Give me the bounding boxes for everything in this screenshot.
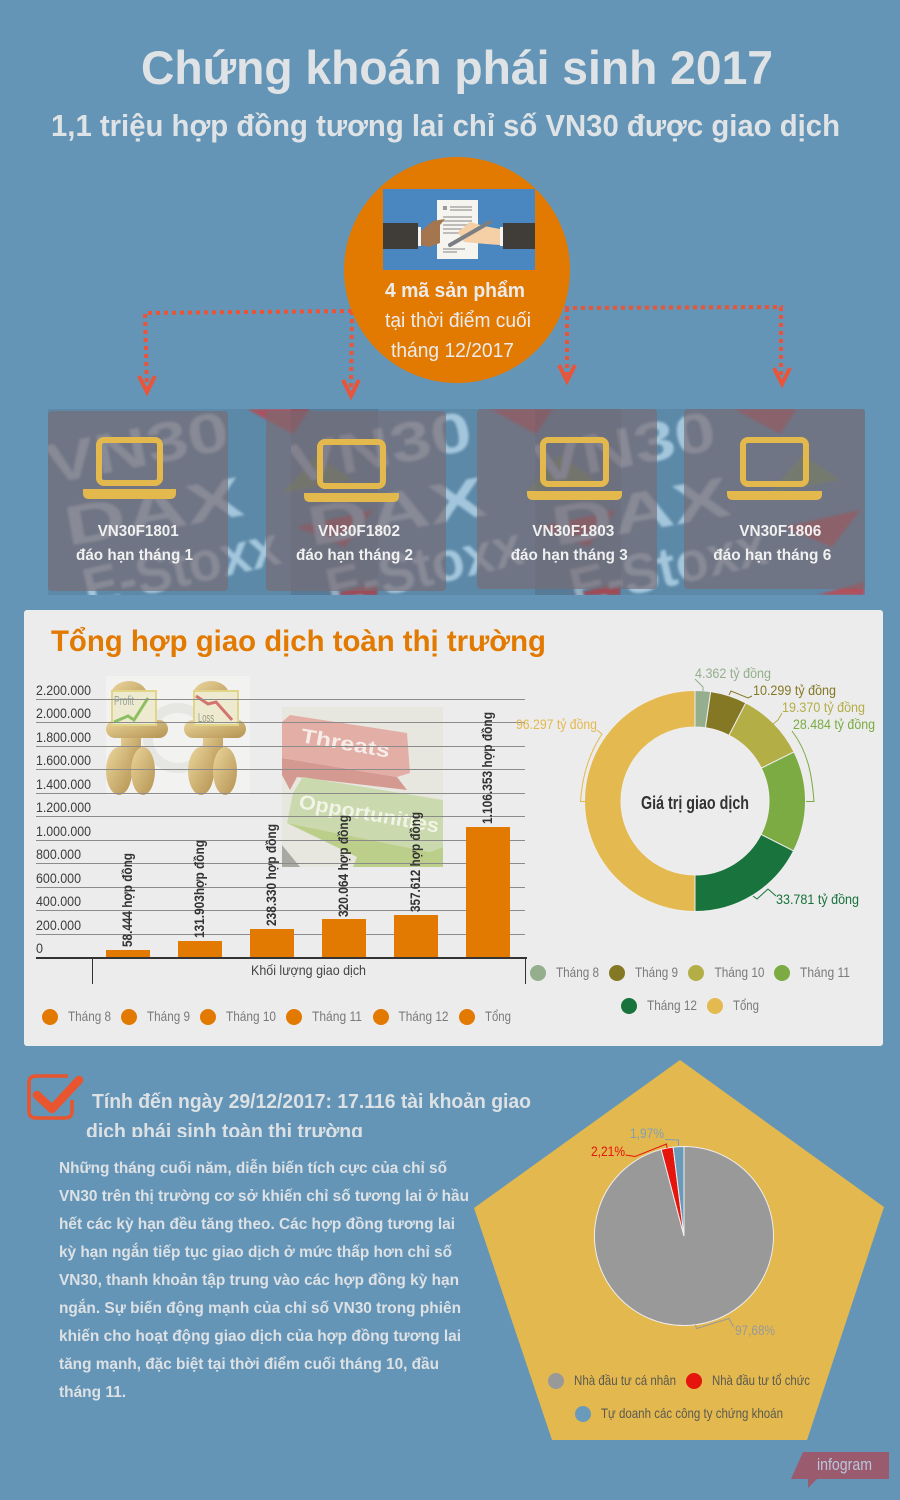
icon: laptop [83, 440, 176, 499]
donut chart legend: Tháng 12 [647, 997, 697, 1013]
icon: contract signing [383, 189, 535, 270]
body paragraph: hết các kỳ hạn đều tăng theo. Các hợp đồng tương lai [59, 1216, 455, 1233]
bar chart legend [42, 1008, 511, 1025]
photo band: blurred market ticker: VN30 [40, 399, 234, 496]
orange circle callout [344, 157, 570, 383]
photo: profit and loss figures: Profit [114, 693, 134, 708]
y axis labels [36, 682, 91, 956]
donut value labels and leaders: 19.370 tỷ đồng [782, 699, 865, 715]
photo band: blurred market ticker: DAX [302, 465, 490, 558]
product label: đáo hạn tháng 2 [296, 547, 413, 564]
product label: VN30F1803 [532, 523, 614, 540]
accounts heading: dịch phái sinh toàn thị trường [86, 1121, 363, 1143]
pie legend: Nhà đầu tư cá nhân [574, 1372, 676, 1388]
donut value labels and leaders [516, 665, 875, 907]
bar chart legend: Tháng 12 [398, 1008, 449, 1024]
bar chart legend: Tháng 11 [312, 1008, 362, 1024]
panel: investor pentagon [474, 1060, 884, 1440]
donut chart legend: Tháng 10 [714, 964, 765, 980]
donut value labels and leaders: 33.781 tỷ đồng [776, 891, 859, 907]
donut chart legend: Tháng 9 [635, 964, 678, 980]
donut centre label: Giá trị giao dịch [641, 793, 749, 813]
donut chart legend: Tháng 11 [800, 964, 850, 980]
product label [296, 523, 413, 564]
product label [511, 523, 628, 564]
bar chart: trading volume [36, 682, 527, 984]
photo: profit and loss figures: Loss [198, 710, 214, 725]
circle text: tháng 12/2017 [391, 340, 514, 362]
pie labels and leaders: 2,21% [591, 1143, 625, 1159]
pie legend: Nhà đầu tư tổ chức [712, 1372, 810, 1388]
axes [36, 957, 527, 959]
photo band: blurred market ticker: E-Stoxx [320, 513, 529, 620]
photo band: blurred market ticker [48, 409, 865, 595]
icon: laptop [304, 442, 399, 502]
icon: laptop [727, 440, 822, 500]
bar chart legend: Tổng [485, 1008, 511, 1024]
body paragraph: khiến cho hoạt động giao dịch của hợp đồng tương lai [59, 1328, 461, 1345]
body paragraph: ngắn. Sự biến động mạnh của chỉ số VN30 trong phiên [59, 1298, 461, 1317]
bar value labels [119, 712, 495, 947]
body paragraph: Những tháng cuối năm, diễn biến tích cực của chỉ số [59, 1158, 447, 1177]
donut chart: trading value [516, 665, 875, 912]
photo: threats and opportunities keys [282, 707, 443, 867]
circle text [385, 280, 531, 362]
y axis labels: 800.000 [36, 846, 81, 862]
pie labels and leaders: 97,68% [735, 1322, 775, 1338]
bar value labels: 238.330 hợp đồng [263, 824, 279, 926]
donut value labels and leaders: 4.362 tỷ đồng [695, 665, 771, 681]
body paragraph: VN30, thanh khoản tập trung vào các hợp đồng kỳ hạn [59, 1272, 459, 1289]
infogram badge: infogram [817, 1455, 872, 1474]
photo: profit and loss figures [106, 676, 250, 795]
y axis labels: 0 [36, 940, 43, 956]
product label: VN30F1806 [739, 523, 821, 540]
y axis labels: 2.200.000 [36, 682, 91, 698]
product label: đáo hạn tháng 3 [511, 547, 628, 564]
circle text: tại thời điểm cuối [385, 310, 531, 332]
y axis labels: 400.000 [36, 893, 81, 909]
product label [76, 523, 193, 564]
y axis labels: 1.800.000 [36, 729, 91, 745]
donut value labels and leaders: 28.484 tỷ đồng [793, 716, 875, 732]
photo band: blurred market ticker: E-Stoxx [77, 513, 286, 620]
panel: VN30F1806 [684, 409, 865, 589]
body paragraph [59, 1158, 469, 1401]
pie legend [548, 1372, 810, 1422]
panel heading: Tổng hợp giao dịch toàn thị trường [51, 625, 546, 658]
circle text: 4 mã sản phẩm [385, 280, 525, 302]
pie chart: investor share [594, 1146, 773, 1326]
photo band: blurred market ticker: VN30 [283, 399, 477, 496]
accounts heading: Tính đến ngày 29/12/2017: 17.116 tài khoản giao [92, 1091, 531, 1113]
product label: VN30F1802 [318, 523, 400, 540]
y axis labels: 200.000 [36, 917, 81, 933]
product label: đáo hạn tháng 1 [76, 547, 193, 564]
icon: laptop [527, 440, 622, 500]
panel: VN30F1801 [48, 411, 228, 591]
body paragraph: kỳ hạn ngắn tiếp tục giao dịch ở mức thấp hơn chỉ số [59, 1242, 452, 1261]
bar value labels: 320.064 hợp đồng [335, 815, 351, 917]
photo: threats and opportunities keys: Opportunities [297, 791, 441, 838]
panel: market summary [24, 610, 883, 1046]
body paragraph: tăng mạnh, đặc biệt tại thời điểm cuối tháng 10, đầu [59, 1355, 439, 1373]
photo band: blurred market ticker: DAX [59, 465, 247, 558]
y axis labels: 1.200.000 [36, 799, 91, 815]
accounts heading [86, 1092, 530, 1137]
bar value labels: 357.612 hợp đồng [407, 812, 423, 912]
donut chart legend [530, 964, 850, 1014]
y axis labels: 1.400.000 [36, 776, 91, 792]
axis title: Khối lượng giao dịch [251, 962, 366, 978]
bar value labels: 1.106.353 hợp đồng [479, 712, 495, 824]
donut value labels and leaders: 10.299 tỷ đồng [753, 682, 836, 698]
bar chart legend: Tháng 9 [147, 1008, 190, 1024]
infogram badge [791, 1452, 889, 1488]
pie legend: Tự doanh các công ty chứng khoán [601, 1405, 783, 1421]
y axis labels: 2.000.000 [36, 705, 91, 721]
pie labels and leaders: 1,97% [630, 1125, 664, 1141]
title: Chứng khoán phái sinh 2017 [141, 41, 773, 94]
photo band: blurred market ticker: E-Stoxx [564, 513, 773, 620]
bar value labels: 131.903hợp đồng [191, 840, 207, 938]
donut value labels and leaders: 96.297 tỷ đồng [516, 716, 597, 732]
bars [106, 827, 510, 957]
product label: đáo hạn tháng 6 [713, 547, 831, 564]
panel: VN30F1803 [477, 409, 657, 589]
y axis labels: 1.600.000 [36, 752, 91, 768]
pie labels and leaders [591, 1125, 775, 1338]
bar chart legend: Tháng 8 [68, 1008, 111, 1024]
donut chart legend: Tháng 8 [556, 964, 599, 980]
dotted arrows from circle to products [139, 307, 790, 396]
product label [713, 523, 831, 564]
subtitle: 1,1 triệu hợp đồng tương lai chỉ số VN30 được giao dịch [51, 108, 840, 143]
product label: VN30F1801 [98, 523, 179, 540]
photo band: blurred market ticker: DAX [546, 465, 734, 558]
bar chart legend: Tháng 10 [226, 1008, 276, 1024]
donut chart legend: Tổng [733, 997, 759, 1013]
photo: threats and opportunities keys: Threats [299, 725, 392, 763]
photo band: blurred market ticker: VN30 [527, 399, 721, 496]
icon: checkbox [29, 1076, 79, 1118]
y axis labels: 600.000 [36, 870, 81, 886]
y axis labels: 1.000.000 [36, 823, 91, 839]
bar value labels: 58.444 hợp đồng [119, 853, 135, 947]
body paragraph: VN30 trên thị trường cơ sở khiến chỉ số tương lai ở hầu [59, 1188, 469, 1205]
body paragraph: tháng 11. [59, 1384, 126, 1401]
panel: VN30F1802 [266, 411, 446, 591]
